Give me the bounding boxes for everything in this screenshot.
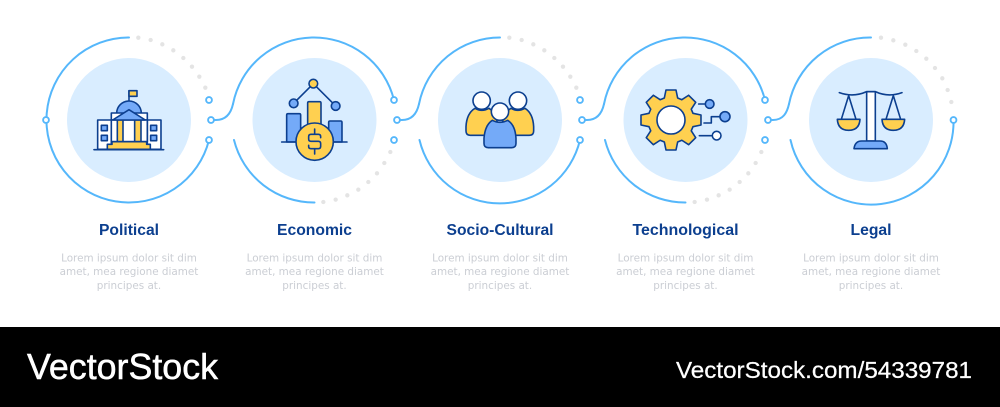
panel: legal (789, 35, 956, 292)
footer bar (0, 327, 1000, 407)
ring: economic (233, 37, 419, 204)
text block: technological: Lorem ipsum dolor sit dim (618, 252, 753, 264)
text block: economic: Lorem ipsum dolor sit dim (247, 252, 382, 264)
heading: socio-cultural: Socio-Cultural (446, 222, 554, 239)
icon: chart and dollar coin (282, 79, 347, 160)
footer logo: VectorStock (27, 346, 219, 387)
text block: economic: amet, mea regione diamet (245, 266, 384, 278)
panel: technological (604, 37, 789, 292)
text block: political: Lorem ipsum dolor sit dim (61, 252, 197, 264)
text block: technological: principes at. (653, 280, 718, 292)
icon: scales of justice (837, 92, 905, 149)
text block: socio-cultural: principes at. (468, 280, 532, 292)
footer image id: VectorStock.com/54339781 (676, 357, 972, 383)
ring: political (43, 35, 233, 203)
ring: socio-cultural (419, 35, 604, 203)
icon: government building (94, 91, 164, 150)
ring: legal (789, 35, 956, 205)
text block: legal: principes at. (839, 280, 903, 292)
panel: socio-cultural (419, 35, 604, 292)
panel: economic (233, 37, 419, 292)
text block: political: amet, mea regione diamet (60, 266, 198, 278)
text block: legal: amet, mea regione diamet (802, 266, 940, 278)
text block: socio-cultural: Lorem ipsum dolor sit dim (432, 252, 568, 264)
ring: technological (604, 37, 789, 204)
text block: technological: amet, mea regione diamet (616, 266, 755, 278)
icon: group of people (466, 92, 534, 148)
heading: economic: Economic (277, 222, 352, 239)
heading: political: Political (99, 222, 159, 239)
panel: political (43, 35, 233, 292)
text block: economic: principes at. (282, 280, 347, 292)
text block: legal: Lorem ipsum dolor sit dim (803, 252, 939, 264)
heading: legal: Legal (850, 222, 892, 239)
icon: gear with circuit nodes (641, 90, 730, 150)
text block: socio-cultural: amet, mea regione diamet (431, 266, 569, 278)
heading: technological: Technological (632, 222, 738, 239)
text block: political: principes at. (97, 280, 161, 292)
